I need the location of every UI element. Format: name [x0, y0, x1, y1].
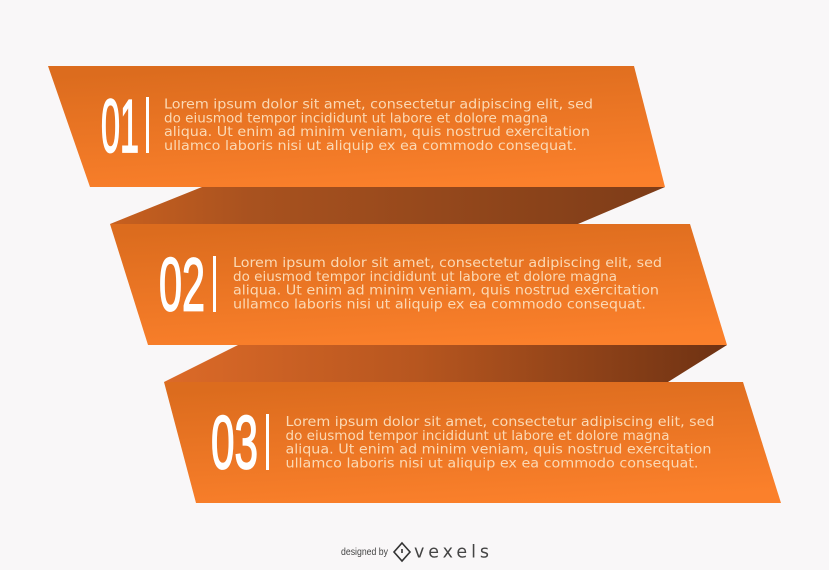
text block 03: aliqua. Ut enim ad minim veniam, quis nostrud exercitation — [286, 442, 712, 458]
number 03 — [211, 400, 269, 484]
text block 02: Lorem ipsum dolor sit amet, consectetur adipiscing elit, sed — [233, 256, 662, 271]
footer: designed by vexels: vexels — [414, 542, 489, 562]
text block 03: ullamco laboris nisi ut aliquip ex ea commodo consequat. — [286, 456, 698, 472]
text block 02: ullamco laboris nisi ut aliquip ex ea commodo consequat. — [233, 298, 646, 312]
text block 01: do eiusmod tempor incididunt ut labore et dolore magna — [164, 112, 548, 126]
text block 03: Lorem ipsum dolor sit amet, consectetur adipiscing elit, sed — [286, 415, 714, 430]
panel: band 02 — [110, 224, 727, 345]
text block 03: do eiusmod tempor incididunt ut labore et dolore magna — [286, 429, 670, 444]
text block 01: aliqua. Ut enim ad minim veniam, quis nostrud exercitation — [164, 125, 590, 140]
number 02: 02 — [159, 242, 205, 326]
number 01 — [101, 84, 149, 168]
text block 02: do eiusmod tempor incididunt ut labore et dolore magna — [233, 270, 617, 285]
text block 01: Lorem ipsum dolor sit amet, consectetur adipiscing elit, sed — [164, 98, 593, 112]
panel: band 01 — [48, 66, 665, 187]
fold between bands 1 and 2 — [110, 187, 665, 224]
fold between bands 2 and 3 — [164, 345, 727, 382]
icon: vexels diamond — [394, 543, 410, 561]
text block 02: aliqua. Ut enim ad minim veniam, quis nostrud exercitation — [233, 284, 659, 298]
number 03: 03 — [211, 400, 258, 484]
number 01: 01 — [101, 84, 139, 168]
footer: designed by vexels: designed by — [341, 547, 388, 558]
footer: designed by vexels — [341, 542, 489, 562]
panel: band 03 — [164, 382, 781, 503]
number 02 — [159, 242, 216, 326]
text block 01: ullamco laboris nisi ut aliquip ex ea commodo consequat. — [164, 139, 577, 154]
